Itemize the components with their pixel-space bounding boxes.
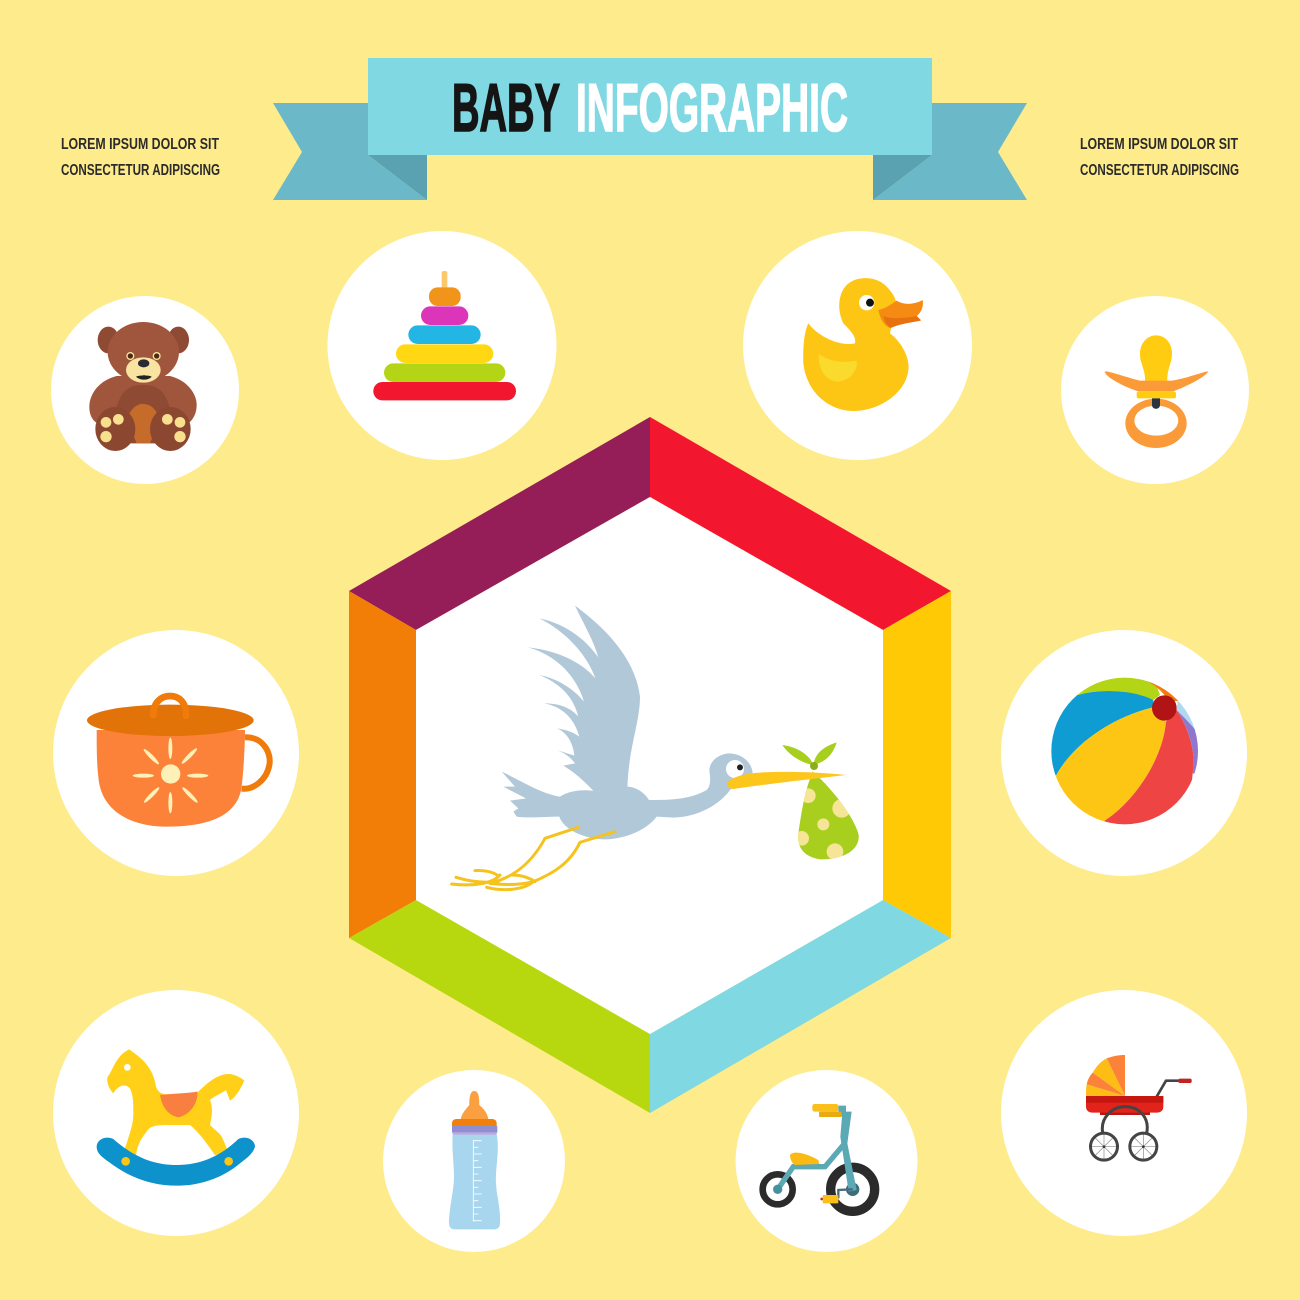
icon: beach ball [1051,678,1198,824]
panel: tricycle circle [736,1070,918,1252]
icon: baby stroller [1086,1055,1192,1160]
icon: baby bottle [449,1091,500,1229]
panel: stacking rings circle [328,231,556,460]
icon: teddy bear [89,322,197,451]
text block: right caption: LOREM IPSUM DOLOR SIT [1080,136,1238,153]
panel: baby bottle circle [383,1070,565,1252]
text block: right caption [1080,136,1239,179]
icon: rocking horse [97,1049,255,1186]
text block: left caption: CONSECTETUR ADIPISCING [61,162,220,179]
icon: potty [87,696,270,827]
icon: tricycle [763,1104,875,1211]
panel: pacifier circle [1061,296,1249,484]
icon: rubber duck [803,278,923,411]
text block: left caption [61,136,220,179]
panel: teddy bear circle [51,296,239,484]
panel: rubber duck circle [743,231,972,460]
text block: right caption: CONSECTETUR ADIPISCING [1080,162,1239,179]
icon: stork carrying bundle [452,606,859,890]
title: Baby Infographic: BABY [452,70,560,146]
title ribbon [273,58,1027,200]
central hexagon frame [349,417,951,1113]
title: Baby Infographic: INFOGRAPHIC [576,70,848,146]
panel: beach ball circle [1001,630,1247,876]
icon: stacking rings pyramid [373,271,516,400]
panel: rocking horse circle [53,990,299,1236]
title: Baby Infographic [452,70,848,146]
icon: pacifier [1105,335,1208,448]
panel: baby stroller circle [1001,990,1247,1236]
panel: potty circle [53,630,299,876]
text block: left caption: LOREM IPSUM DOLOR SIT [61,136,219,153]
